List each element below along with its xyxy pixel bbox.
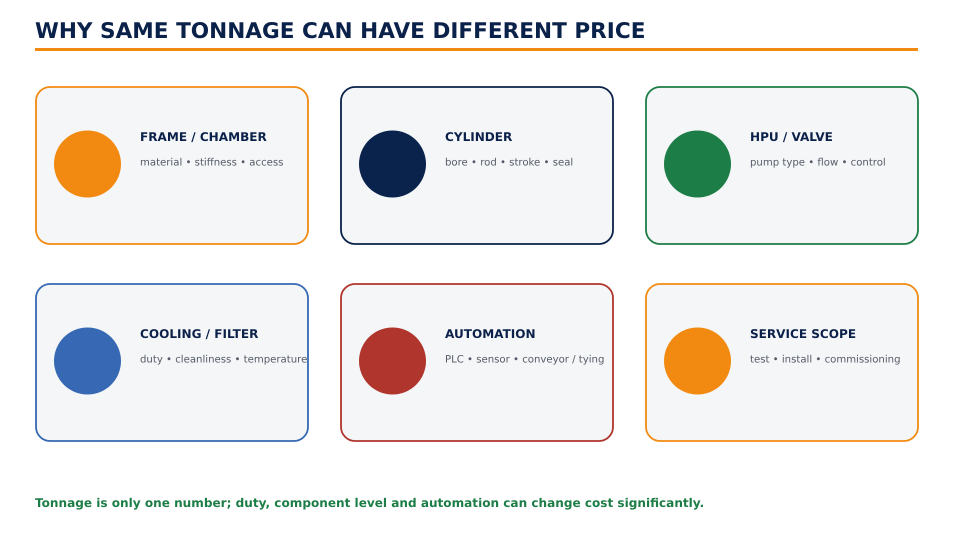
panel: automation [341, 284, 613, 441]
text: hpu details: pump type • flow • control [750, 158, 886, 168]
text: cylinder details: bore • rod • stroke • seal [445, 158, 573, 168]
icon: blue circle [54, 328, 121, 394]
footer note: Tonnage is only one number; duty, component level and automation can change cost significantly. [35, 496, 704, 510]
text: cooling details: duty • cleanliness • temperature [140, 354, 307, 366]
heading: cooling / filter: COOLING / FILTER [140, 327, 259, 341]
panel: hpu / valve [646, 87, 918, 244]
heading: cylinder: CYLINDER [445, 130, 513, 144]
heading: automation: AUTOMATION [445, 327, 536, 341]
panel: frame / chamber [36, 87, 308, 244]
panel: service scope [646, 284, 918, 441]
icon: orange circle [664, 328, 731, 394]
text: automation details: PLC • sensor • conveyor / tying [445, 354, 604, 366]
panel: cylinder [341, 87, 613, 244]
icon: navy circle [359, 130, 426, 198]
icon: orange circle [54, 130, 121, 198]
panel: cooling / filter [36, 284, 308, 441]
icon: green circle [664, 130, 731, 198]
text: service details: test • install • commissioning [750, 354, 901, 366]
heading: frame / chamber: FRAME / CHAMBER [140, 130, 267, 144]
title: WHY SAME TONNAGE CAN HAVE DIFFERENT PRICE [35, 19, 645, 44]
icon: red circle [359, 328, 426, 394]
heading: hpu / valve: HPU / VALVE [750, 130, 833, 144]
title underline [35, 48, 918, 51]
text: frame details: material • stiffness • access [140, 158, 283, 168]
heading: service scope: SERVICE SCOPE [750, 327, 856, 341]
